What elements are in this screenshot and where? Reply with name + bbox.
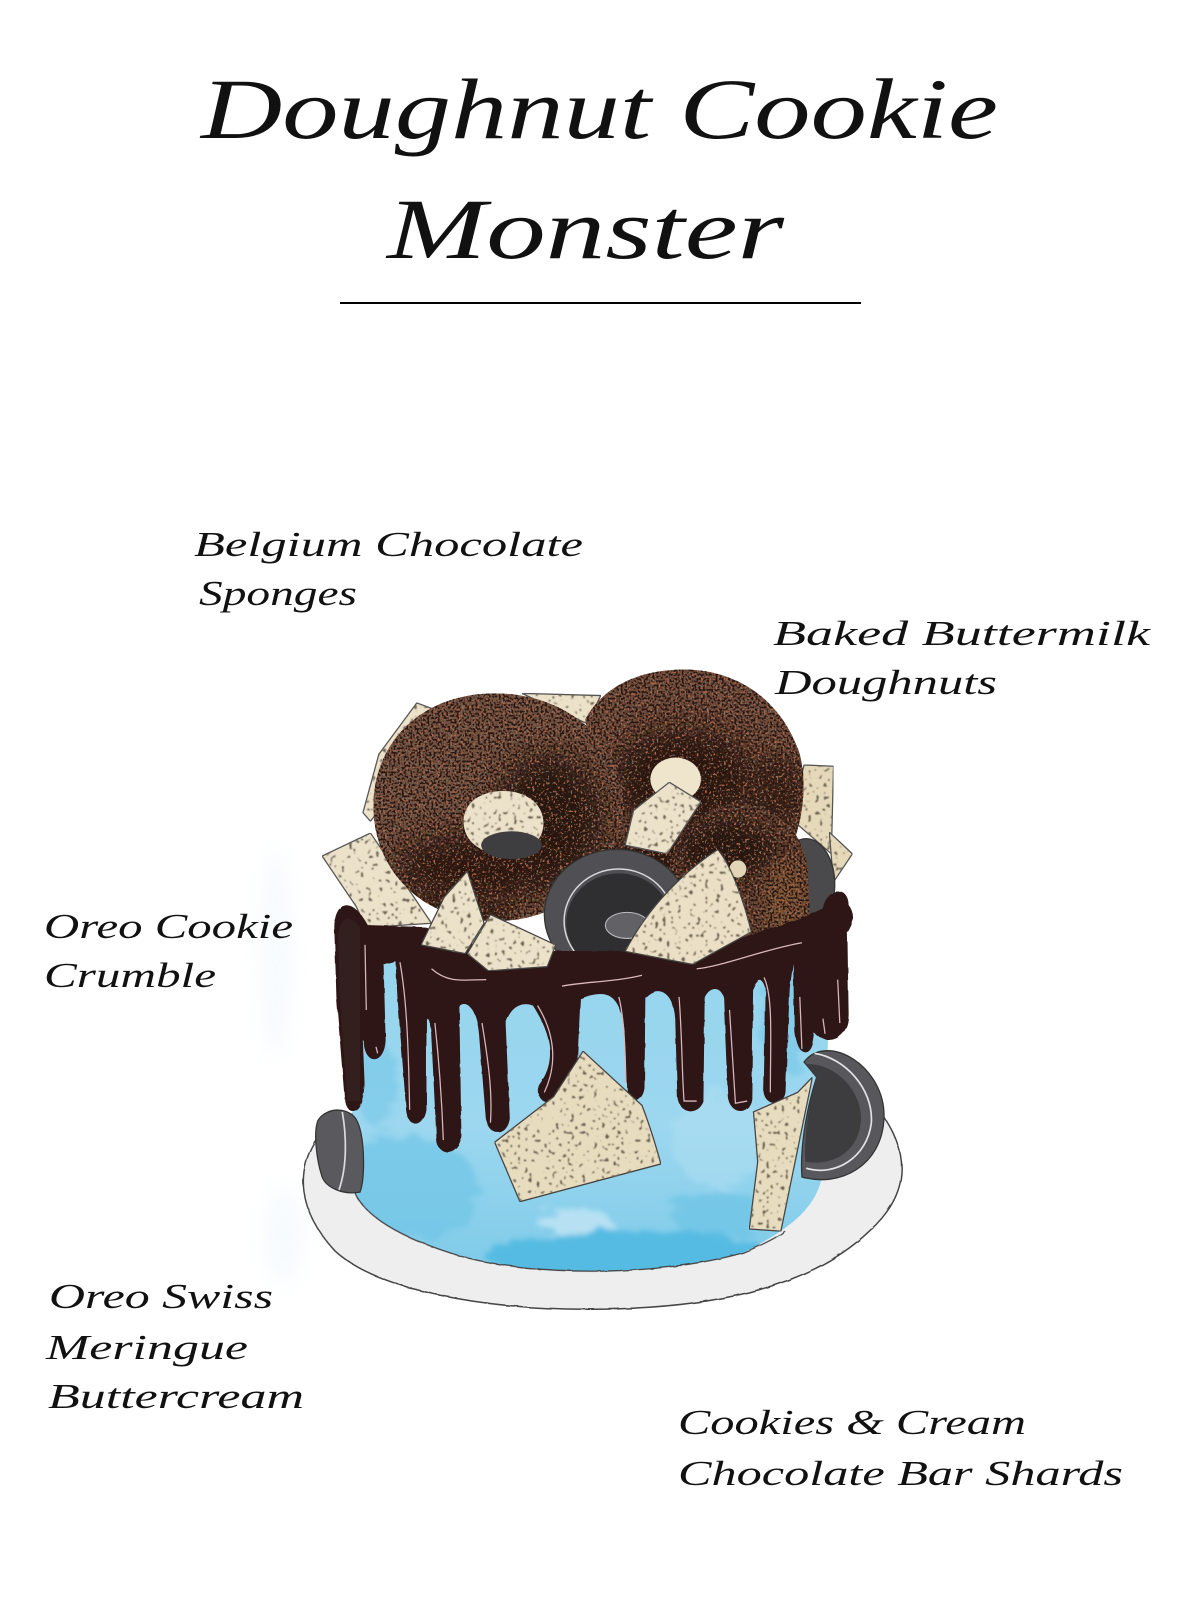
label: Belgium Chocolate Sponges xyxy=(194,525,583,613)
faint watercolour wash xyxy=(259,850,305,1283)
shard: right lower xyxy=(749,1077,812,1231)
shard: middle xyxy=(625,782,701,854)
shard: back left xyxy=(363,703,438,821)
chocolate drip xyxy=(337,894,851,1149)
small doughnut hole xyxy=(730,860,746,878)
doughnut: small xyxy=(670,804,810,940)
shard: back centre xyxy=(522,693,601,724)
label: Cookies & Cream Chocolate Bar Shards: Chocolate Bar Shards xyxy=(678,1454,1123,1493)
label: Oreo Cookie Crumble xyxy=(44,907,293,995)
cake illustration xyxy=(259,663,902,1309)
oreo: centre xyxy=(544,850,689,980)
label: Oreo Swiss Meringue Buttercream: Meringue xyxy=(45,1328,248,1367)
title: Doughnut Cookie xyxy=(200,61,998,157)
label: Baked Buttermilk Doughnuts: Baked Buttermilk xyxy=(773,614,1152,653)
label: Oreo Swiss Meringue Buttercream: Oreo Swiss xyxy=(49,1277,273,1316)
shard: left xyxy=(322,833,432,928)
shard: far right xyxy=(829,832,852,882)
label: Cookies & Cream Chocolate Bar Shards: Cookies & Cream xyxy=(678,1403,1026,1442)
label: Baked Buttermilk Doughnuts: Doughnuts xyxy=(774,663,997,702)
shard: front low xyxy=(467,915,556,971)
label: Oreo Cookie Crumble: Crumble xyxy=(44,956,216,995)
label: Belgium Chocolate Sponges: Belgium Chocolate xyxy=(194,525,583,564)
plate xyxy=(303,1084,902,1309)
doughnut hole fill: top right xyxy=(650,758,701,801)
cake body: blue buttercream xyxy=(335,954,831,1284)
shard: front large xyxy=(625,850,751,964)
oreo: right xyxy=(802,1051,884,1180)
label: Baked Buttermilk Doughnuts xyxy=(773,614,1152,702)
label: Oreo Swiss Meringue Buttercream: Buttercream xyxy=(48,1377,304,1416)
doughnut: large xyxy=(374,693,623,921)
label: Oreo Swiss Meringue Buttercream xyxy=(45,1277,304,1416)
left darker drip tint xyxy=(338,919,360,1101)
oreo: back right xyxy=(778,839,835,930)
doughnut: top right xyxy=(585,670,804,870)
oreo: left xyxy=(316,1110,364,1193)
title underline xyxy=(340,302,861,304)
doughnut hole: large xyxy=(464,791,543,859)
shard: front left triangle xyxy=(421,871,484,954)
label: Belgium Chocolate Sponges: Sponges xyxy=(199,574,357,613)
title xyxy=(200,61,998,277)
shard: on cake side xyxy=(495,1051,661,1202)
label: Cookies & Cream Chocolate Bar Shards xyxy=(678,1403,1123,1493)
shard: back right xyxy=(791,765,833,854)
label: Oreo Cookie Crumble: Oreo Cookie xyxy=(44,907,293,946)
title: Monster xyxy=(384,181,785,277)
